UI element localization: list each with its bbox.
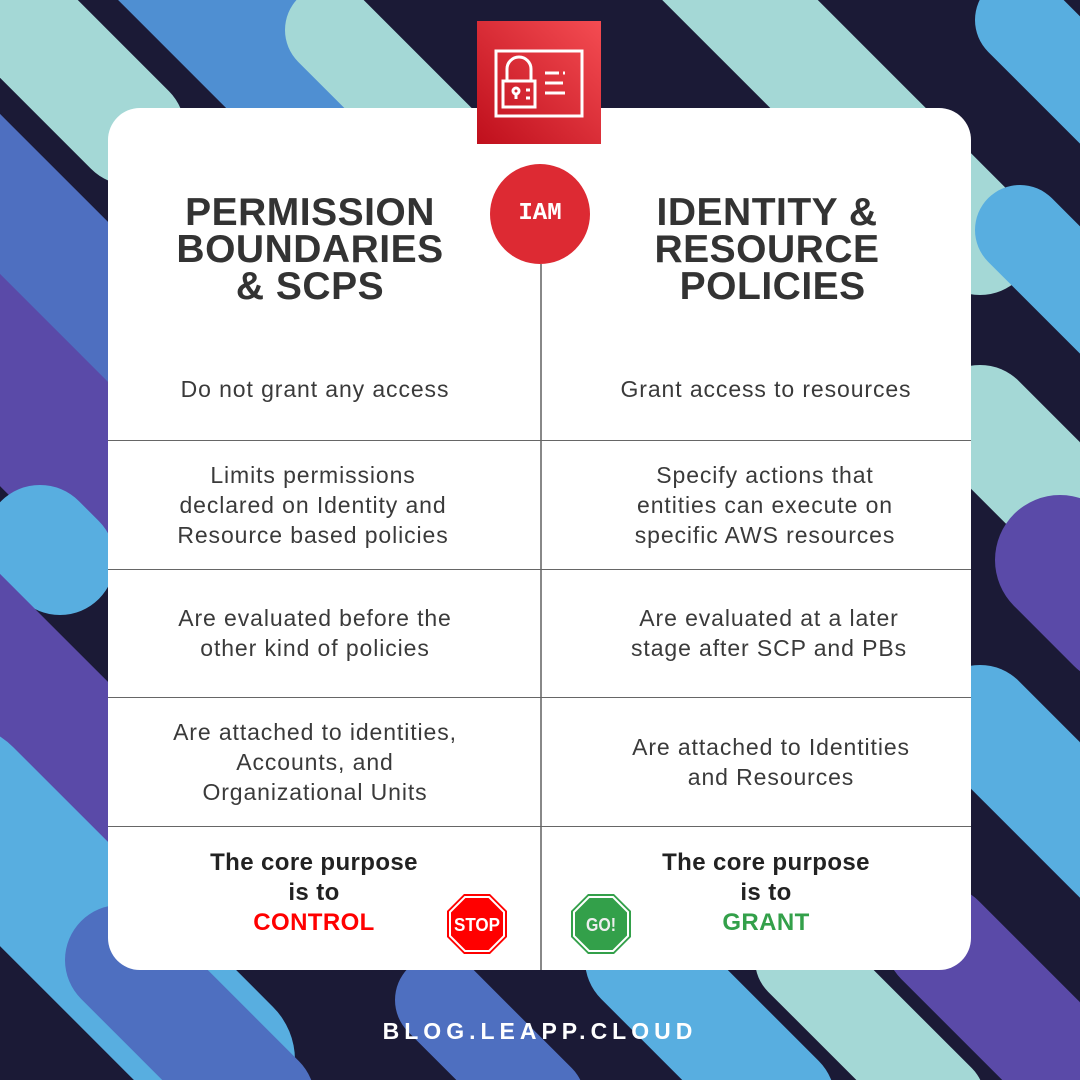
text: Specify actions that bbox=[656, 462, 874, 488]
icon: IAM circle: IAM bbox=[518, 200, 562, 227]
footer: BLOG.LEAPP.CLOUD bbox=[383, 1018, 697, 1044]
core purpose right bbox=[662, 849, 870, 936]
text: Organizational Units bbox=[202, 778, 428, 804]
icon: stop sign: STOP bbox=[454, 915, 500, 935]
core purpose right: GRANT bbox=[722, 909, 810, 936]
heading: right: IDENTITY & bbox=[657, 191, 877, 234]
text: and Resources bbox=[688, 764, 854, 790]
heading: left: & SCPS bbox=[236, 265, 384, 308]
heading: left: BOUNDARIES bbox=[176, 228, 444, 271]
icon: go sign: GO! bbox=[586, 915, 616, 935]
card bbox=[108, 108, 971, 970]
core purpose right: is to bbox=[740, 879, 792, 906]
icon: IAM badge bbox=[477, 21, 601, 144]
text: Resource based policies bbox=[177, 522, 449, 548]
core purpose left: CONTROL bbox=[253, 909, 375, 936]
text: Are evaluated before the bbox=[178, 605, 452, 631]
heading: left: PERMISSION bbox=[185, 191, 435, 234]
core purpose left: is to bbox=[288, 879, 340, 906]
core purpose left: The core purpose bbox=[210, 849, 418, 876]
left rows: Do not grant any access bbox=[181, 376, 449, 402]
text: other kind of policies bbox=[200, 635, 430, 661]
right rows: Grant access to resources bbox=[621, 376, 911, 402]
icon: IAM circle bbox=[490, 164, 590, 264]
heading: left bbox=[176, 191, 444, 308]
text: stage after SCP and PBs bbox=[631, 635, 907, 661]
text: Are evaluated at a later bbox=[639, 605, 899, 631]
core purpose left bbox=[210, 849, 418, 936]
text: Are attached to Identities bbox=[632, 734, 910, 760]
text: Limits permissions bbox=[210, 462, 416, 488]
text: Accounts, and bbox=[236, 748, 394, 774]
core purpose right: The core purpose bbox=[662, 849, 870, 876]
text: declared on Identity and bbox=[179, 492, 447, 518]
heading: right: RESOURCE bbox=[654, 228, 880, 271]
heading: right: POLICIES bbox=[680, 265, 866, 308]
text: entities can execute on bbox=[637, 492, 893, 518]
icon: stop sign bbox=[447, 894, 507, 954]
text: Are attached to identities, bbox=[173, 718, 457, 744]
heading: right bbox=[654, 191, 880, 308]
icon: go sign bbox=[571, 894, 631, 954]
text: specific AWS resources bbox=[635, 522, 895, 548]
